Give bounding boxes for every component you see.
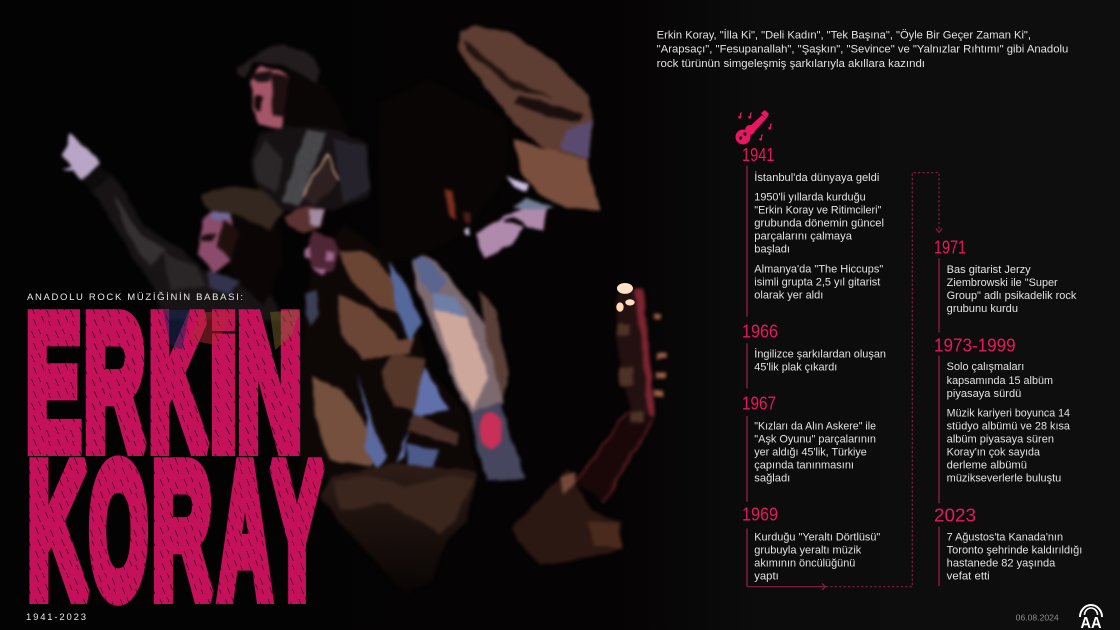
- guitar strap: [410, 250, 503, 413]
- headstock flare: [616, 283, 635, 312]
- timeline: 1967: "Kızları da Alın Askere" ile: [754, 420, 876, 432]
- timeline: 1973-1999: Müzik kariyeri boyunca 14: [947, 408, 1070, 420]
- timeline: 1969: yaptı: [754, 571, 779, 583]
- dates of life: 1941-2023: [26, 612, 86, 623]
- title: ERKIN KORAY: K: [149, 277, 207, 488]
- timeline: 1941: 1950'li yıllarda kurduğu: [754, 191, 866, 203]
- timeline: 1967: çapında tanınmasını: [754, 459, 854, 471]
- timeline: 2023: [934, 506, 1082, 586]
- timeline: 1941: İstanbul'da dünyaya geldi: [754, 171, 879, 184]
- timeline: 1941: olarak yer aldı: [754, 289, 823, 301]
- timeline: 1969: akımının öncülüğünü: [754, 558, 855, 570]
- title: ERKIN KORAY: [26, 276, 323, 630]
- timeline: 1973-1999: stüdyo albümü ve 28 kısa: [947, 421, 1070, 433]
- timeline: 1973-1999: 1973-1999: [934, 336, 1016, 356]
- guitar headstock, neck, sleeve and hand: [320, 288, 667, 596]
- figure: main guitarist, head and hat: [380, 25, 601, 260]
- timeline: 2023: Toronto şehrinde kaldırıldığı: [947, 545, 1082, 557]
- timeline: 1973-1999: albüm piyasaya süren: [947, 434, 1054, 446]
- title: ERKIN KORAY: N: [237, 276, 302, 489]
- timeline: 1941: grubunda dönemin güncel: [754, 218, 884, 230]
- timeline: 2023: vefat etti: [947, 571, 990, 583]
- logo: AA: [1080, 605, 1102, 630]
- timeline: 1967: sağladı: [754, 472, 790, 484]
- timeline: 1966: 45'lik plak çıkardı: [754, 361, 837, 373]
- timeline: 1971: 1971: [934, 237, 966, 257]
- subtitle: ANADOLU ROCK MÜZİĞİNİN BABASI:: [27, 292, 243, 303]
- strap badge: [479, 412, 502, 448]
- timeline: 2023: 2023: [934, 506, 976, 526]
- timeline: 1971: Group" adlı psikadelik rock: [947, 290, 1077, 302]
- timeline: 1969: Kurduğu "Yeraltı Dörtlüsü": [754, 532, 881, 544]
- timeline: 1941: [742, 145, 884, 317]
- timeline: 1973-1999: derleme albümü: [947, 460, 1027, 472]
- timeline: 1971: [934, 237, 1077, 332]
- title: ERKIN KORAY: I: [210, 277, 237, 489]
- timeline: 1967: "Aşk Oyunu" parçalarının: [754, 433, 876, 445]
- timeline connector arrow: [747, 173, 942, 590]
- figure: kneeling with raised arm: [62, 133, 325, 320]
- timeline: 1973-1999: müzikseverlerle buluştu: [947, 473, 1061, 485]
- photo: three guitarist figures: [62, 25, 667, 596]
- timeline: 1941: isimli grupta 2,5 yıl gitarist: [754, 276, 880, 288]
- title: ERKIN KORAY: R: [84, 278, 145, 489]
- intro paragraph: Erkin Koray, "İlla Ki", "Deli Kadın", "Tek Başına", "Öyle Bir Geçer Zaman Ki",: [657, 29, 1031, 42]
- timeline: 1966: [742, 321, 886, 388]
- timeline: 1969: grubuyla yeraltı müzik: [754, 545, 862, 557]
- title: ERKIN KORAY: E: [26, 277, 81, 489]
- timeline: 1973-1999: piyasaya sürdü: [947, 388, 1021, 400]
- timeline: 1973-1999: kapsamında 15 albüm: [947, 375, 1053, 387]
- figure: main guitarist, torso: [300, 223, 525, 480]
- dot gap of the dotted capital I, and photo showing through the letters: [163, 310, 300, 350]
- timeline: 1941: "Erkin Koray ve Ritimcileri": [754, 205, 882, 217]
- date: 06.08.2024: [1016, 613, 1059, 623]
- timeline: 1973-1999: [934, 336, 1070, 503]
- figure: singer at top: [238, 43, 370, 210]
- timeline: 1966: 1966: [742, 321, 778, 341]
- timeline: 1941: Almanya'da "The Hiccups": [754, 263, 884, 275]
- timeline: 1971: Bas gitarist Jerzy: [947, 264, 1031, 276]
- timeline: 1941: 1941: [742, 145, 774, 165]
- timeline: 1969: [742, 505, 881, 587]
- timeline: 1973-1999: Solo çalışmaları: [947, 361, 1024, 373]
- timeline: 1941: başladı: [754, 244, 790, 256]
- intro paragraph: [657, 29, 1068, 70]
- timeline: 1966: İngilizce şarkılardan oluşan: [754, 347, 886, 360]
- intro paragraph: "Arapsaçı", "Fesupanallah", "Şaşkın", "Sevince" ve "Yalnızlar Rıhtımı" gibi Anadolu: [657, 44, 1068, 56]
- timeline: 1967: yer aldığı 45'lik, Türkiye: [754, 446, 867, 458]
- timeline: 2023: 7 Ağustos'ta Kanada'nın: [947, 532, 1063, 544]
- icon: guitar with notes: [736, 110, 772, 144]
- timeline: 1941: parçalarını çalmaya: [754, 231, 852, 243]
- face highlights: [507, 177, 528, 193]
- timeline: 1967: 1967: [742, 393, 776, 413]
- timeline: 1971: Ziembrowski ile "Super: [947, 277, 1058, 289]
- timeline: 1971: grubunu kurdu: [947, 303, 1018, 315]
- timeline: 1967: [742, 393, 876, 502]
- intro paragraph: rock türünün simgeleşmiş şarkılarıyla akıllara kazındı: [657, 58, 925, 70]
- timeline: 1973-1999: Koray'ın çok sayıda: [947, 447, 1040, 459]
- timeline: 1969: 1969: [742, 505, 778, 525]
- timeline: 2023: hastanede 82 yaşında: [947, 558, 1055, 570]
- left hand: [305, 230, 338, 277]
